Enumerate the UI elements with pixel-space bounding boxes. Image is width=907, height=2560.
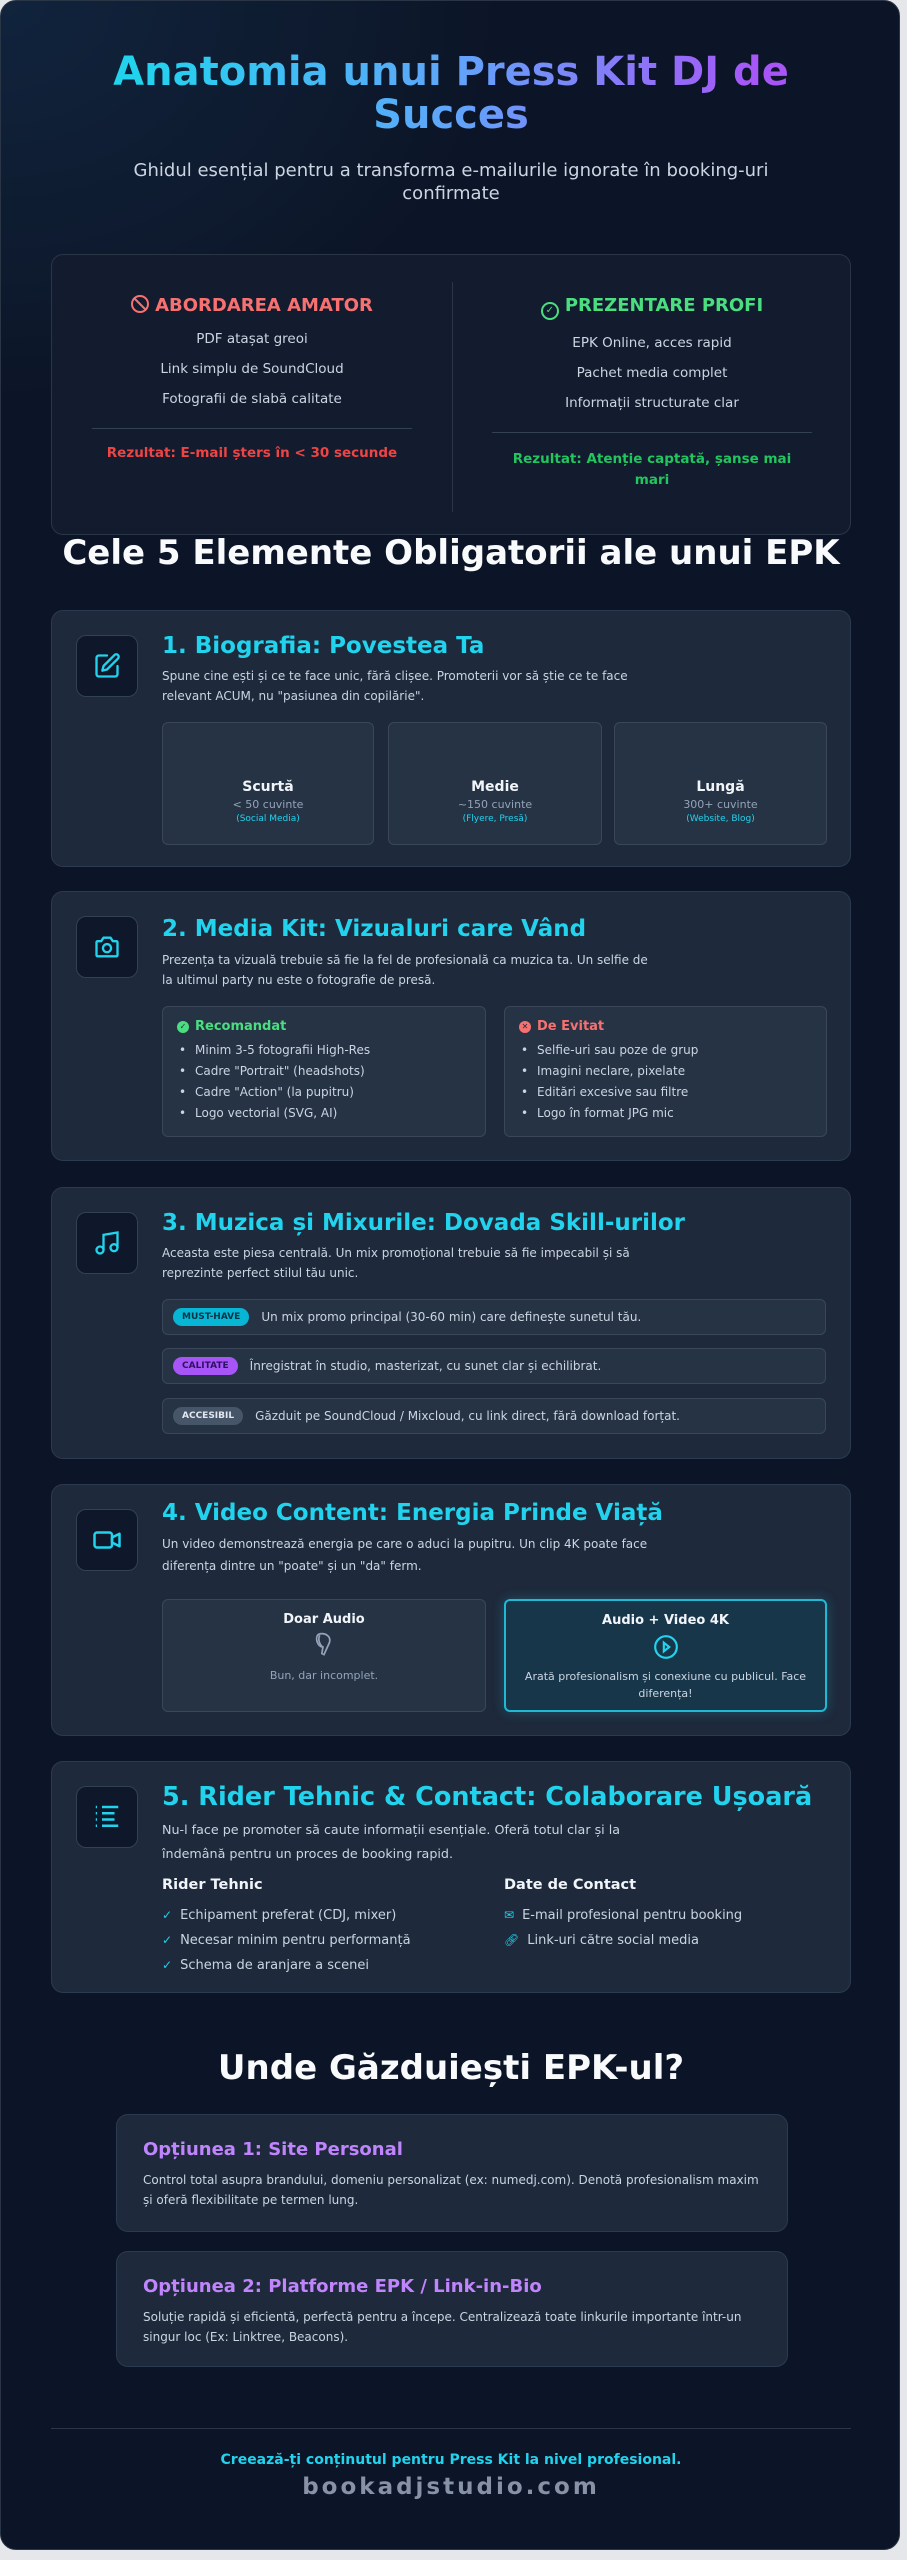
box: audio + video: Arată profesionalism și conexiune cu publicul. Face diferența! [525,1670,806,1700]
footer: bookadjstudio.com [302,2474,600,2500]
text: Prezența ta vizuală trebuie să fie la fel de profesională ca muzica ta. Un selfie de la ultimul party nu este o fotografie de presă. [162,953,648,987]
box: doar audio: Doar Audio [283,1612,365,1627]
box: de evitat: Editări excesive sau filtre [537,1085,688,1099]
title: Succes [373,92,529,138]
icon: music [76,1212,138,1274]
heading: 5. Rider Tehnic & Contact: Colaborare Ușoară [162,1782,812,1812]
box: audio + video [504,1599,827,1712]
option 2: Opțiunea 2: Platforme EPK / Link-in-Bio [143,2276,542,2297]
icon: video [76,1509,138,1571]
list: rider: ✓ Necesar minim pentru performanță [162,1933,411,1948]
column: profi: PREZENTARE PROFI [565,295,763,316]
panel: biografia: Medie [471,779,519,795]
list: contact: ✉ E-mail profesional pentru booking [504,1908,742,1923]
panel: media kit [51,891,851,1161]
box: recomandat: Minim 3-5 fotografii High-Res [195,1043,370,1057]
text: Nu-l face pe promoter să caute informații esențiale. Oferă totul clar și la îndemână pentru un proces de booking rapid. [162,1822,620,1861]
box: de evitat: De Evitat [537,1019,604,1034]
box: recomandat: ✓ [180,1022,186,1031]
column: amator: Link simplu de SoundCloud [160,361,344,377]
footer: Creează-ți conținutul pentru Press Kit la nivel profesional. [221,2452,681,2468]
option 1: Opțiunea 1: Site Personal [143,2139,403,2160]
row: must-have [162,1299,826,1335]
text: Spune cine ești și ce te face unic, fără clișee. Promoterii vor să știe ce te face relevant ACUM, nu "pasiunea din copilărie". [162,669,628,703]
icon: camera [76,916,138,978]
title: Anatomia unui Press Kit DJ de [113,49,789,95]
column: amator: PDF atașat greoi [196,331,308,347]
box: de evitat [504,1006,827,1137]
box: de evitat: Imagini neclare, pixelate [537,1064,685,1078]
boxes: lengths: (Social Media) [236,814,300,824]
option 2: Soluție rapidă și eficientă, perfectă pentru a începe. Centralizează toate linkurile importante într-un singur loc (Ex: Linktree, Beacons). [143,2310,741,2344]
heading: 1. Biografia: Povestea Ta [162,633,484,659]
panel: biografia: Lungă [696,779,745,795]
column: amator: Rezultat: E-mail șters în < 30 secunde [107,445,397,461]
column: amator: Fotografii de slabă calitate [162,391,342,407]
column: amator: ABORDAREA AMATOR [155,295,373,316]
box: recomandat: Cadre "Portrait" (headshots) [195,1064,365,1078]
row: must-have: Un mix promo principal (30-60 min) care definește sunetul tău. [261,1310,641,1324]
title [61,51,841,137]
option 1 [116,2114,788,2232]
text: Aceasta este piesa centrală. Un mix promoțional trebuie să fie impecabil și să reprezinte perfect stilul tău unic. [162,1246,630,1280]
box: de evitat: Logo în format JPG mic [537,1106,674,1120]
heading: 3. Muzica și Mixurile: Dovada Skill-urilor [162,1210,685,1236]
box: recomandat: Recomandat [195,1019,286,1034]
panel: biografia [51,610,851,867]
list: contact: Date de Contact [504,1877,636,1893]
row: accesibil [162,1398,826,1434]
row: must-have: MUST-HAVE [182,1312,240,1322]
heading: 5 elemente: Cele 5 Elemente Obligatorii ale unui EPK [62,533,840,573]
column: profi: Rezultat: Atenție captată, șanse mai mari [513,451,791,488]
panel: rider & contact [51,1761,851,1993]
option 2 [116,2251,788,2367]
column: profi: ✓ [546,305,554,316]
panel: biografia: (Flyere, Presă) [463,814,527,824]
row: calitate: CALITATE [182,1361,229,1371]
column: profi: EPK Online, acces rapid [572,335,732,351]
list: contact [504,1877,742,1948]
panel: biografia: (Website, Blog) [686,814,755,824]
box: doar audio: Bun, dar incomplet. [270,1669,378,1682]
box: audio + video: Audio + Video 4K [602,1613,729,1628]
row: calitate [162,1348,826,1384]
panel: comparison [51,254,851,535]
list: rider: ✓ Schema de aranjare a scenei [162,1958,369,1973]
heading: unde gazduiesti: Unde Găzduiești EPK-ul? [218,2048,684,2088]
column: profi [492,295,812,488]
list: rider: ✓ Echipament preferat (CDJ, mixer) [162,1908,396,1923]
column: amator [92,295,412,461]
boxes: lengths: Scurtă [242,779,294,795]
text: Un video demonstrează energia pe care o aduci la pupitru. Un clip 4K poate face diferența dintre un "poate" și un "da" ferm. [162,1537,647,1573]
subtitle: Ghidul esențial pentru a transforma e-mailurile ignorate în booking-uri confirmate [134,160,768,204]
boxes: lengths [162,722,374,845]
row: accesibil: Găzduit pe SoundCloud / Mixcloud, cu link direct, fără download forțat. [255,1409,680,1423]
icon: pencil [76,635,138,697]
box: recomandat: Cadre "Action" (la pupitru) [195,1085,354,1099]
panel: biografia: ~150 cuvinte [458,798,532,811]
panel: muzica [51,1187,851,1459]
icon: list [76,1786,138,1848]
box: de evitat: Selfie-uri sau poze de grup [537,1043,698,1057]
column: profi: Informații structurate clar [565,395,739,411]
option 1: Control total asupra brandului, domeniu personalizat (ex: numedj.com). Denotă profesionalism maxim și oferă flexibilitate pe termen lung. [143,2173,759,2207]
footer [221,2452,681,2500]
box: doar audio [162,1599,486,1712]
list: rider [162,1877,411,1973]
heading: 4. Video Content: Energia Prinde Viață [162,1500,663,1526]
row: accesibil: ACCESIBIL [182,1411,234,1421]
box: recomandat [162,1006,486,1137]
panel: biografia: 300+ cuvinte [683,798,758,811]
box: recomandat: Logo vectorial (SVG, AI) [195,1106,337,1120]
column: profi: Pachet media complet [577,365,727,381]
row: calitate: Înregistrat în studio, masterizat, cu sunet clar și echilibrat. [250,1359,601,1373]
list: rider: Rider Tehnic [162,1877,263,1893]
list: contact: 🔗︎ Link-uri către social media [504,1933,699,1948]
heading: 2. Media Kit: Vizualuri care Vând [162,916,586,942]
boxes: lengths: < 50 cuvinte [233,798,303,811]
panel: video [51,1484,851,1736]
box: de evitat: ✕ [522,1022,528,1031]
